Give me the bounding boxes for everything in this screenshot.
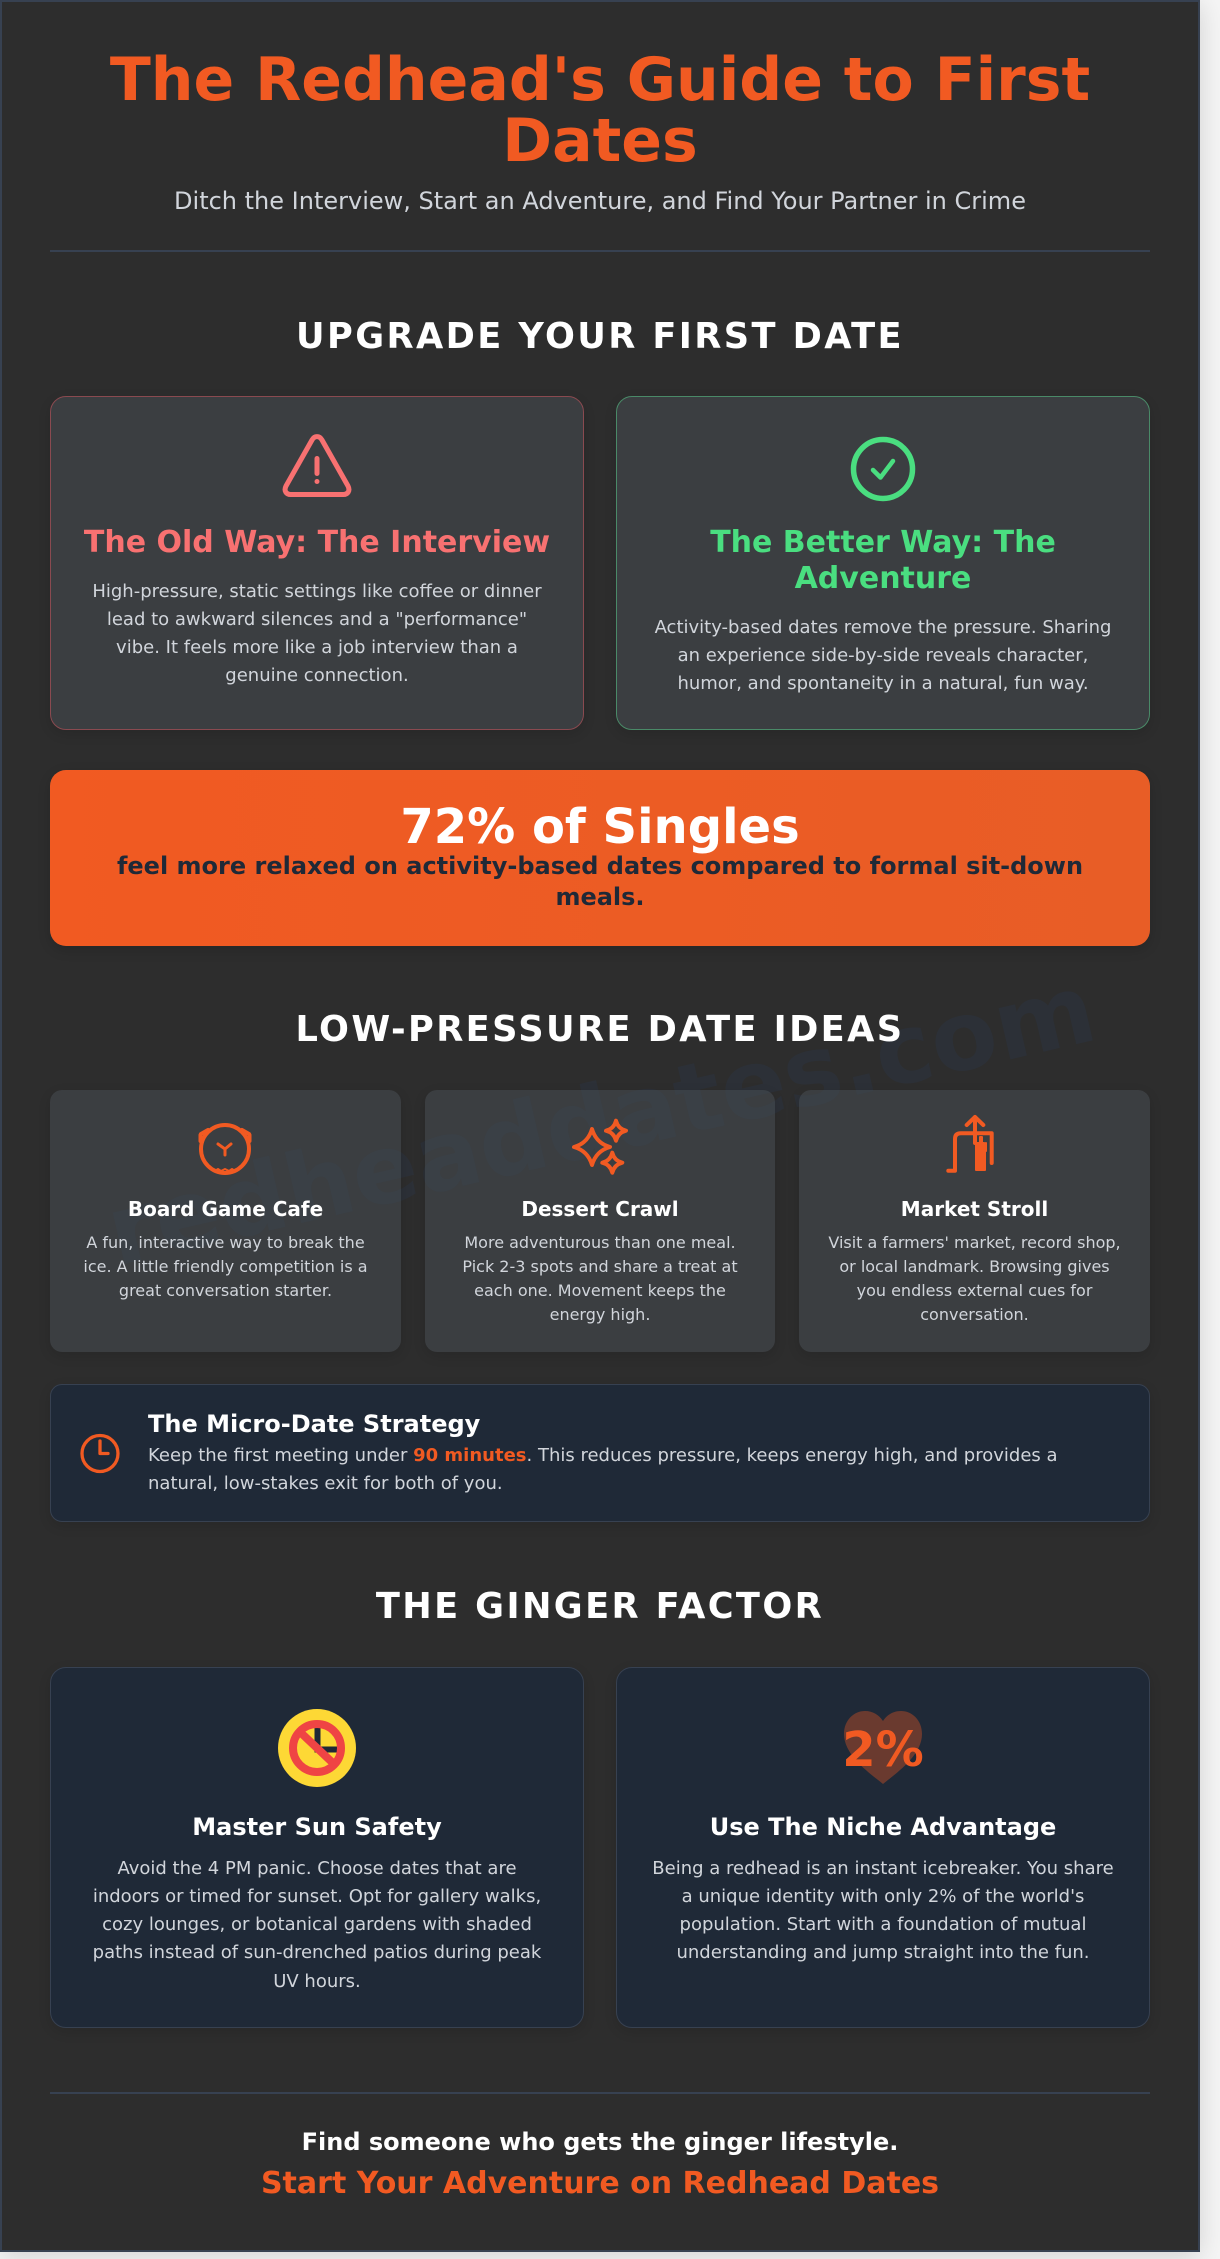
icon: sparkles <box>572 1118 628 1175</box>
subtitle: Ditch the Interview, Start an Adventure, and Find Your Partner in Crime <box>174 187 1026 215</box>
card text: each one. Movement keeps the <box>474 1281 726 1300</box>
icon: check circle <box>850 436 916 502</box>
panel heading: Adventure <box>795 561 971 596</box>
card text: ice. A little friendly competition is a <box>83 1257 368 1276</box>
panel: the niche advantage <box>616 1667 1150 2028</box>
panel text <box>654 617 1111 694</box>
callout text <box>148 1445 1058 1494</box>
panel: the old way <box>50 396 584 730</box>
panel: dessert crawl <box>425 1090 775 1352</box>
card text: great conversation starter. <box>119 1281 332 1300</box>
callout text: natural, low-stakes exit for both of you. <box>148 1473 503 1494</box>
section heading: low-pressure date ideas: LOW-PRESSURE DATE IDEAS <box>295 1009 904 1050</box>
panel text: a unique identity with only 2% of the world's <box>682 1886 1084 1907</box>
card text: More adventurous than one meal. <box>464 1233 736 1252</box>
card text: Pick 2-3 spots and share a treat at <box>462 1257 738 1276</box>
panel text: indoors or timed for sunset. Opt for gallery walks, <box>93 1886 541 1907</box>
panel text <box>652 1858 1114 1963</box>
stat description <box>117 852 1083 911</box>
card heading: Dessert Crawl <box>521 1197 679 1221</box>
panel text: High-pressure, static settings like coffee or dinner <box>92 581 542 602</box>
icon: clock <box>80 1434 120 1474</box>
call to action: Start Your Adventure on Redhead Dates <box>261 2166 939 2201</box>
panel: board game cafe <box>50 1090 401 1352</box>
panel text: cozy lounges, or botanical gardens with shaded <box>102 1914 532 1935</box>
panel text <box>93 1858 542 1992</box>
card text: conversation. <box>920 1305 1029 1324</box>
panel: market stroll <box>799 1090 1150 1352</box>
panel heading <box>710 525 1056 596</box>
callout: 72% statistic <box>50 770 1150 946</box>
panel heading: The Old Way: The Interview <box>84 525 550 560</box>
card text: A fun, interactive way to break the <box>86 1233 365 1252</box>
panel text: population. Start with a foundation of mutual <box>680 1914 1086 1935</box>
panel text: understanding and jump straight into the fun. <box>676 1942 1090 1963</box>
panel heading: Master Sun Safety <box>192 1813 442 1841</box>
panel heading: The Better Way: The <box>710 525 1056 560</box>
card heading: Board Game Cafe <box>128 1197 323 1221</box>
icon: market path with arrow <box>946 1114 994 1173</box>
panel text: UV hours. <box>273 1971 361 1992</box>
panel heading: Use The Niche Advantage <box>710 1813 1056 1841</box>
panel text: an experience side-by-side reveals character, <box>678 645 1088 666</box>
card text: Visit a farmers' market, record shop, <box>828 1233 1121 1252</box>
icon: no sun <box>278 1709 356 1787</box>
card text <box>828 1233 1121 1324</box>
panel text: Avoid the 4 PM panic. Choose dates that are <box>117 1858 517 1879</box>
stat description: feel more relaxed on activity-based dates compared to formal sit-down <box>117 852 1083 880</box>
card heading: Market Stroll <box>901 1197 1048 1221</box>
icon: warning triangle <box>282 434 352 497</box>
card text: you endless external cues for <box>857 1281 1092 1300</box>
panel: master sun safety <box>50 1667 584 2028</box>
panel text: Activity-based dates remove the pressure. Sharing <box>655 617 1111 638</box>
footer divider <box>50 2092 1150 2094</box>
callout text: Keep the first meeting under 90 minutes. This reduces pressure, keeps energy high, and provides a <box>148 1445 1058 1466</box>
card text: or local landmark. Browsing gives <box>839 1257 1110 1276</box>
card text: energy high. <box>550 1305 650 1324</box>
card text <box>83 1233 368 1300</box>
header divider <box>50 250 1150 252</box>
panel text: Being a redhead is an instant icebreaker. You share <box>652 1858 1114 1879</box>
panel text: lead to awkward silences and a "performance" <box>107 609 527 630</box>
title <box>110 45 1090 176</box>
stat description: meals. <box>555 883 645 911</box>
icon: heart with 2%: 2% <box>842 1722 924 1778</box>
panel text <box>92 581 542 686</box>
icon: game timer <box>198 1123 252 1175</box>
watermark: redheaddates.com <box>97 952 1105 1288</box>
panel text: humor, and spontaneity in a natural, fun way. <box>677 673 1089 694</box>
stat number: 72% of Singles <box>400 799 800 855</box>
title: The Redhead's Guide to First <box>110 45 1090 115</box>
callout: micro-date strategy <box>50 1384 1150 1522</box>
section heading: upgrade your first date: UPGRADE YOUR FIRST DATE <box>296 316 904 357</box>
section heading: the ginger factor: THE GINGER FACTOR <box>376 1586 824 1627</box>
panel text: vibe. It feels more like a job interview than a <box>116 637 518 658</box>
panel text: paths instead of sun-drenched patios during peak <box>93 1942 541 1963</box>
card text <box>462 1233 738 1324</box>
footer text: Find someone who gets the ginger lifestyle. <box>302 2128 898 2156</box>
title: Dates <box>502 106 698 176</box>
panel text: genuine connection. <box>225 665 409 686</box>
panel: the better way <box>616 396 1150 730</box>
callout heading: The Micro-Date Strategy <box>148 1410 480 1438</box>
